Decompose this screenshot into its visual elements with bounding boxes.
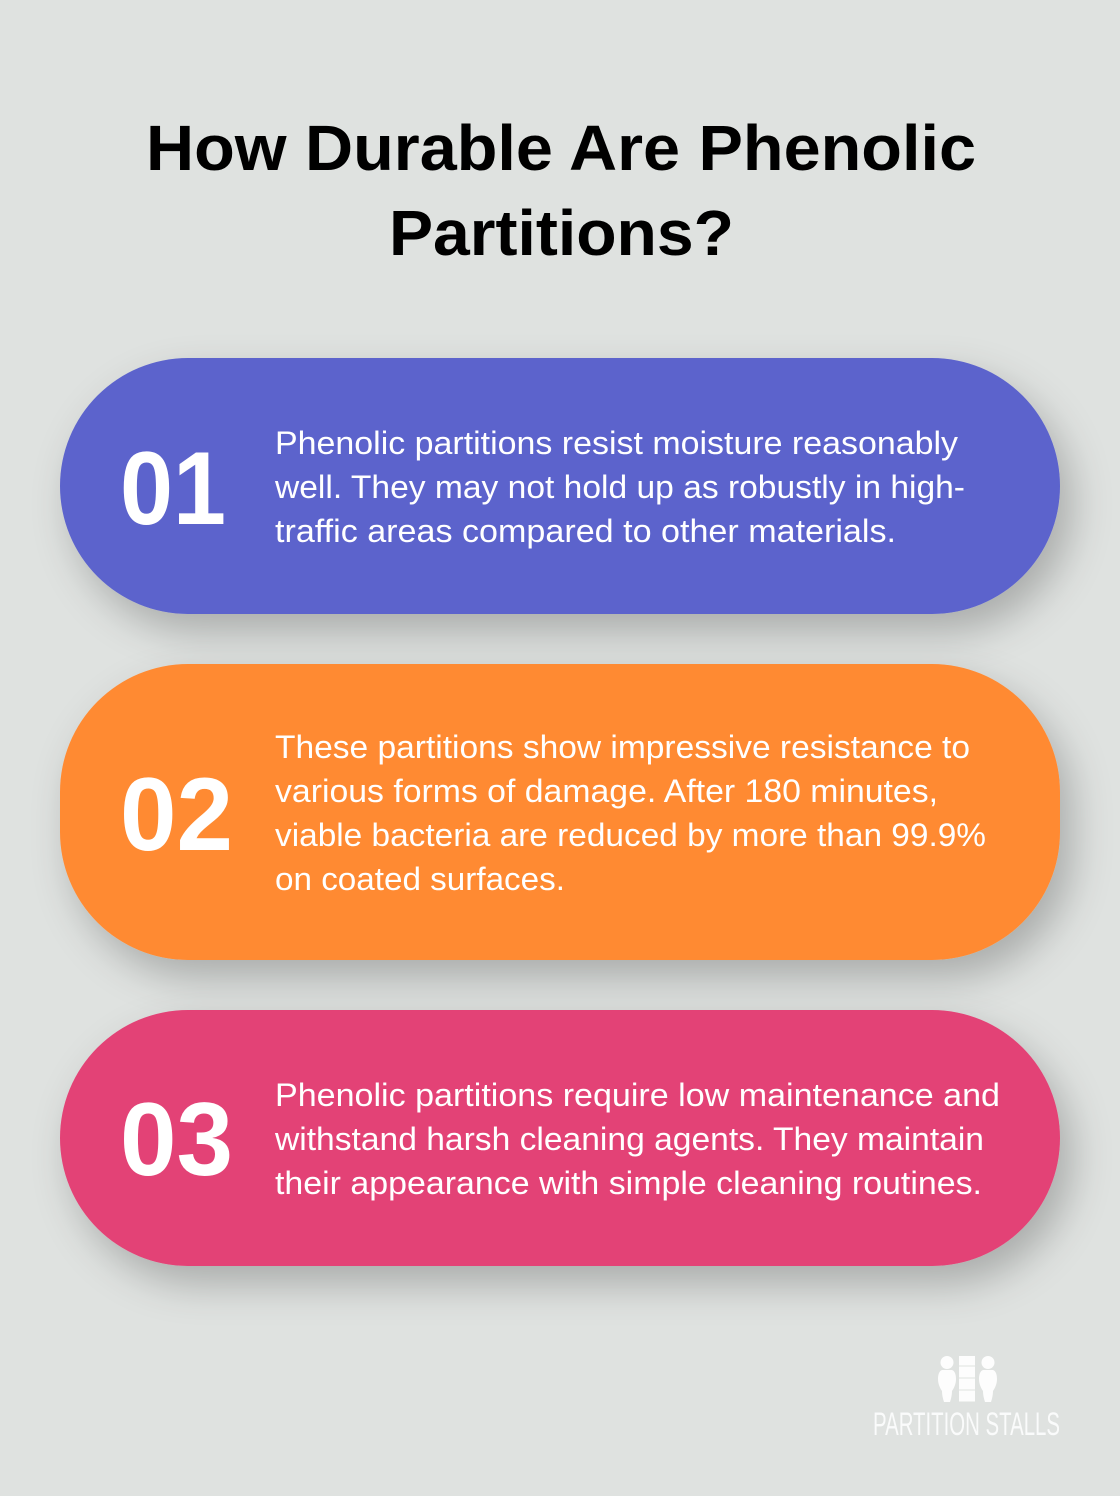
text block 02: These partitions show impressive resistance to: [275, 729, 970, 765]
icon: two people and partition: [938, 1356, 997, 1402]
title: [146, 112, 976, 269]
panel: step 03 maintenance: [60, 1010, 1060, 1266]
pill: blue: [60, 358, 1060, 614]
text block 01: well. They may not hold up as robustly in high-: [274, 469, 965, 505]
text block 02: various forms of damage. After 180 minutes,: [275, 773, 938, 809]
text block 03: their appearance with simple cleaning routines.: [275, 1165, 982, 1201]
number 01: 01: [120, 431, 226, 547]
text block 01: Phenolic partitions resist moisture reasonably: [275, 425, 959, 461]
title: How Durable Are Phenolic: [146, 112, 976, 184]
text block 01: [274, 425, 965, 549]
logo: Partition Stalls: [873, 1356, 1060, 1442]
text block 03: [274, 1077, 1000, 1201]
text block 03: Phenolic partitions require low maintenance and: [275, 1077, 1000, 1113]
panel: step 02 damage: [60, 664, 1060, 960]
text block 01: traffic areas compared to other materials.: [275, 513, 896, 549]
text block 02: viable bacteria are reduced by more than 99.9%: [275, 817, 986, 853]
text block 02: [275, 729, 986, 897]
pill: orange: [60, 664, 1060, 960]
number 03: 03: [120, 1082, 233, 1198]
panel: step 01 moisture: [60, 358, 1060, 614]
text block 03: withstand harsh cleaning agents. They maintain: [274, 1121, 984, 1157]
text block 02: on coated surfaces.: [275, 861, 565, 897]
pill: pink: [60, 1010, 1060, 1266]
number 02: 02: [120, 757, 233, 873]
title: Partitions?: [389, 197, 734, 269]
